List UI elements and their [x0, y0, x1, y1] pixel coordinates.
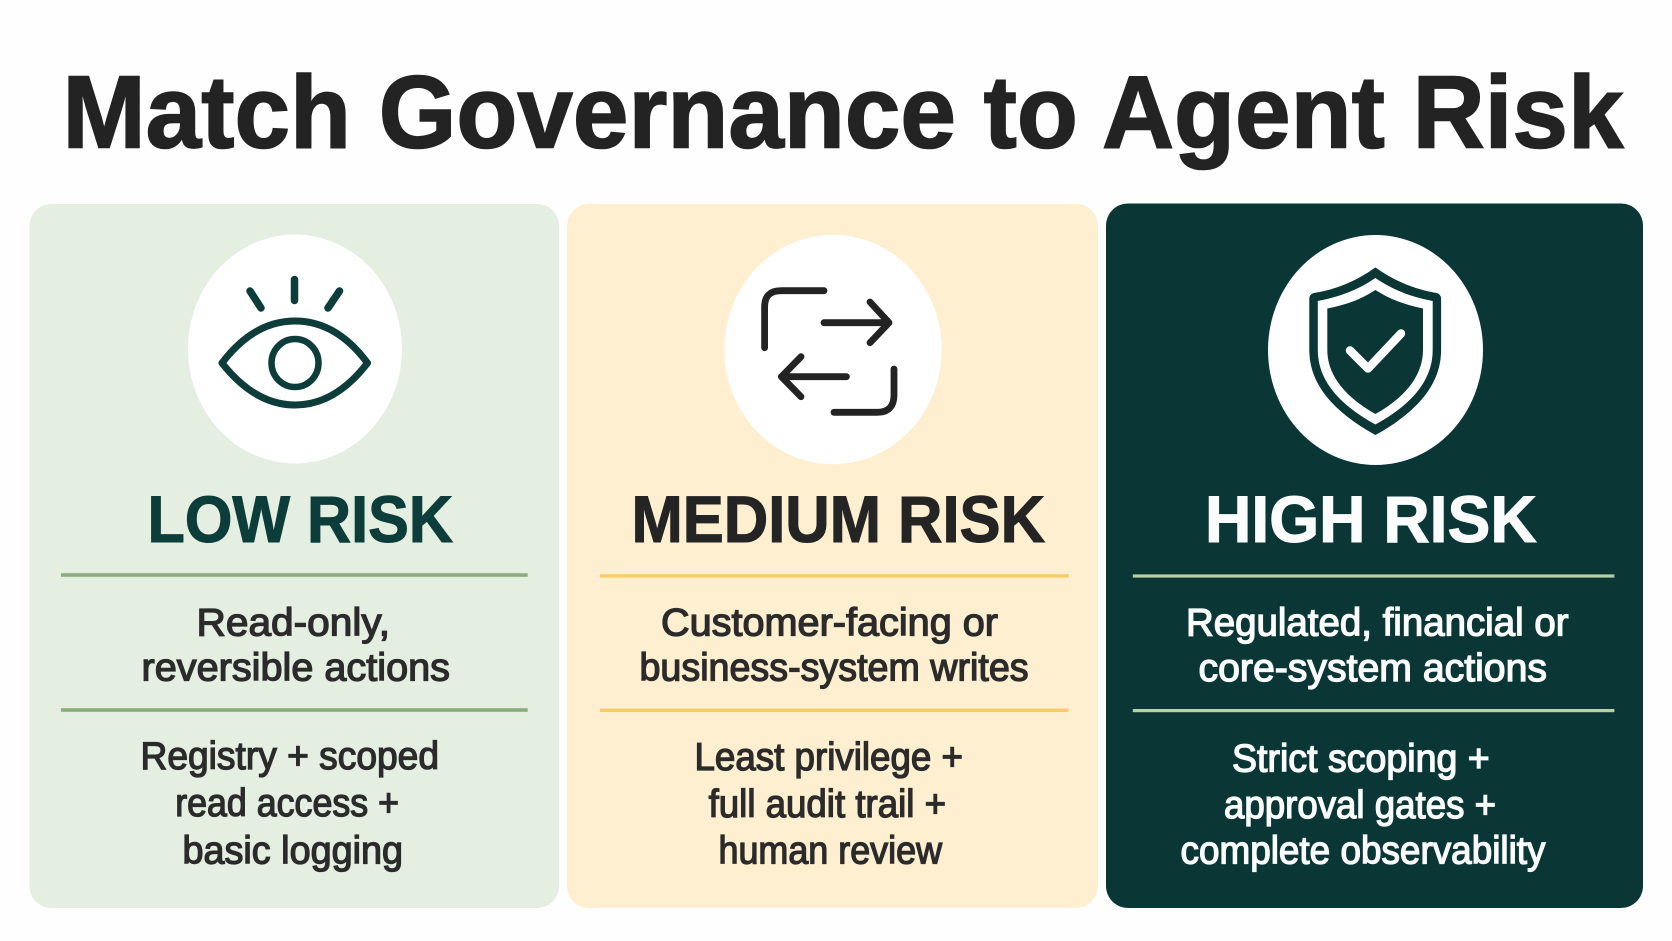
medium risk card background: [567, 204, 1098, 908]
divider: [61, 573, 528, 577]
text: risk description: [640, 602, 1029, 690]
text: risk description: Customer-facing or: [661, 602, 998, 644]
text: governance controls: [694, 736, 963, 872]
icon: exchange arrows in white circle: [724, 235, 942, 464]
icon: shield with check in white circle: [1268, 235, 1483, 465]
panel: low risk: [30, 204, 559, 908]
panel: high risk: [1106, 204, 1643, 908]
text: governance controls: [1180, 738, 1546, 873]
text: governance controls: read access +: [175, 782, 399, 825]
text: governance controls: [140, 735, 439, 872]
text: governance controls: full audit trail +: [709, 783, 946, 826]
divider: [600, 709, 1069, 712]
text: risk description: core-system actions: [1198, 647, 1547, 690]
text: risk description: Regulated, financial or: [1186, 602, 1569, 644]
heading: medium risk: MEDIUM RISK: [632, 482, 1045, 556]
text: risk description: [1186, 602, 1569, 690]
divider: [600, 574, 1069, 578]
text: governance controls: Strict scoping +: [1232, 738, 1490, 781]
divider: [1133, 709, 1614, 712]
divider: [61, 708, 528, 712]
text: governance controls: Registry + scoped: [140, 735, 439, 778]
text: risk description: reversible actions: [142, 646, 450, 690]
text: governance controls: approval gates +: [1224, 784, 1496, 827]
text: risk description: [142, 602, 450, 690]
text: risk description: business-system writes: [640, 646, 1029, 690]
panel: medium risk: [567, 204, 1098, 908]
text: governance controls: complete observability: [1180, 830, 1546, 873]
text: risk description: Read-only,: [196, 602, 390, 644]
text: governance controls: human review: [718, 829, 942, 872]
title: Match Governance to Agent Risk: [62, 54, 1624, 169]
text: governance controls: Least privilege +: [694, 736, 963, 779]
high risk card background: [1106, 204, 1643, 908]
heading: low risk: LOW RISK: [148, 482, 453, 556]
text: governance controls: basic logging: [182, 829, 403, 872]
low risk card background: [30, 204, 559, 908]
divider: [1133, 574, 1614, 578]
heading: high risk: HIGH RISK: [1205, 482, 1537, 556]
icon: eye in white circle: [188, 234, 402, 464]
